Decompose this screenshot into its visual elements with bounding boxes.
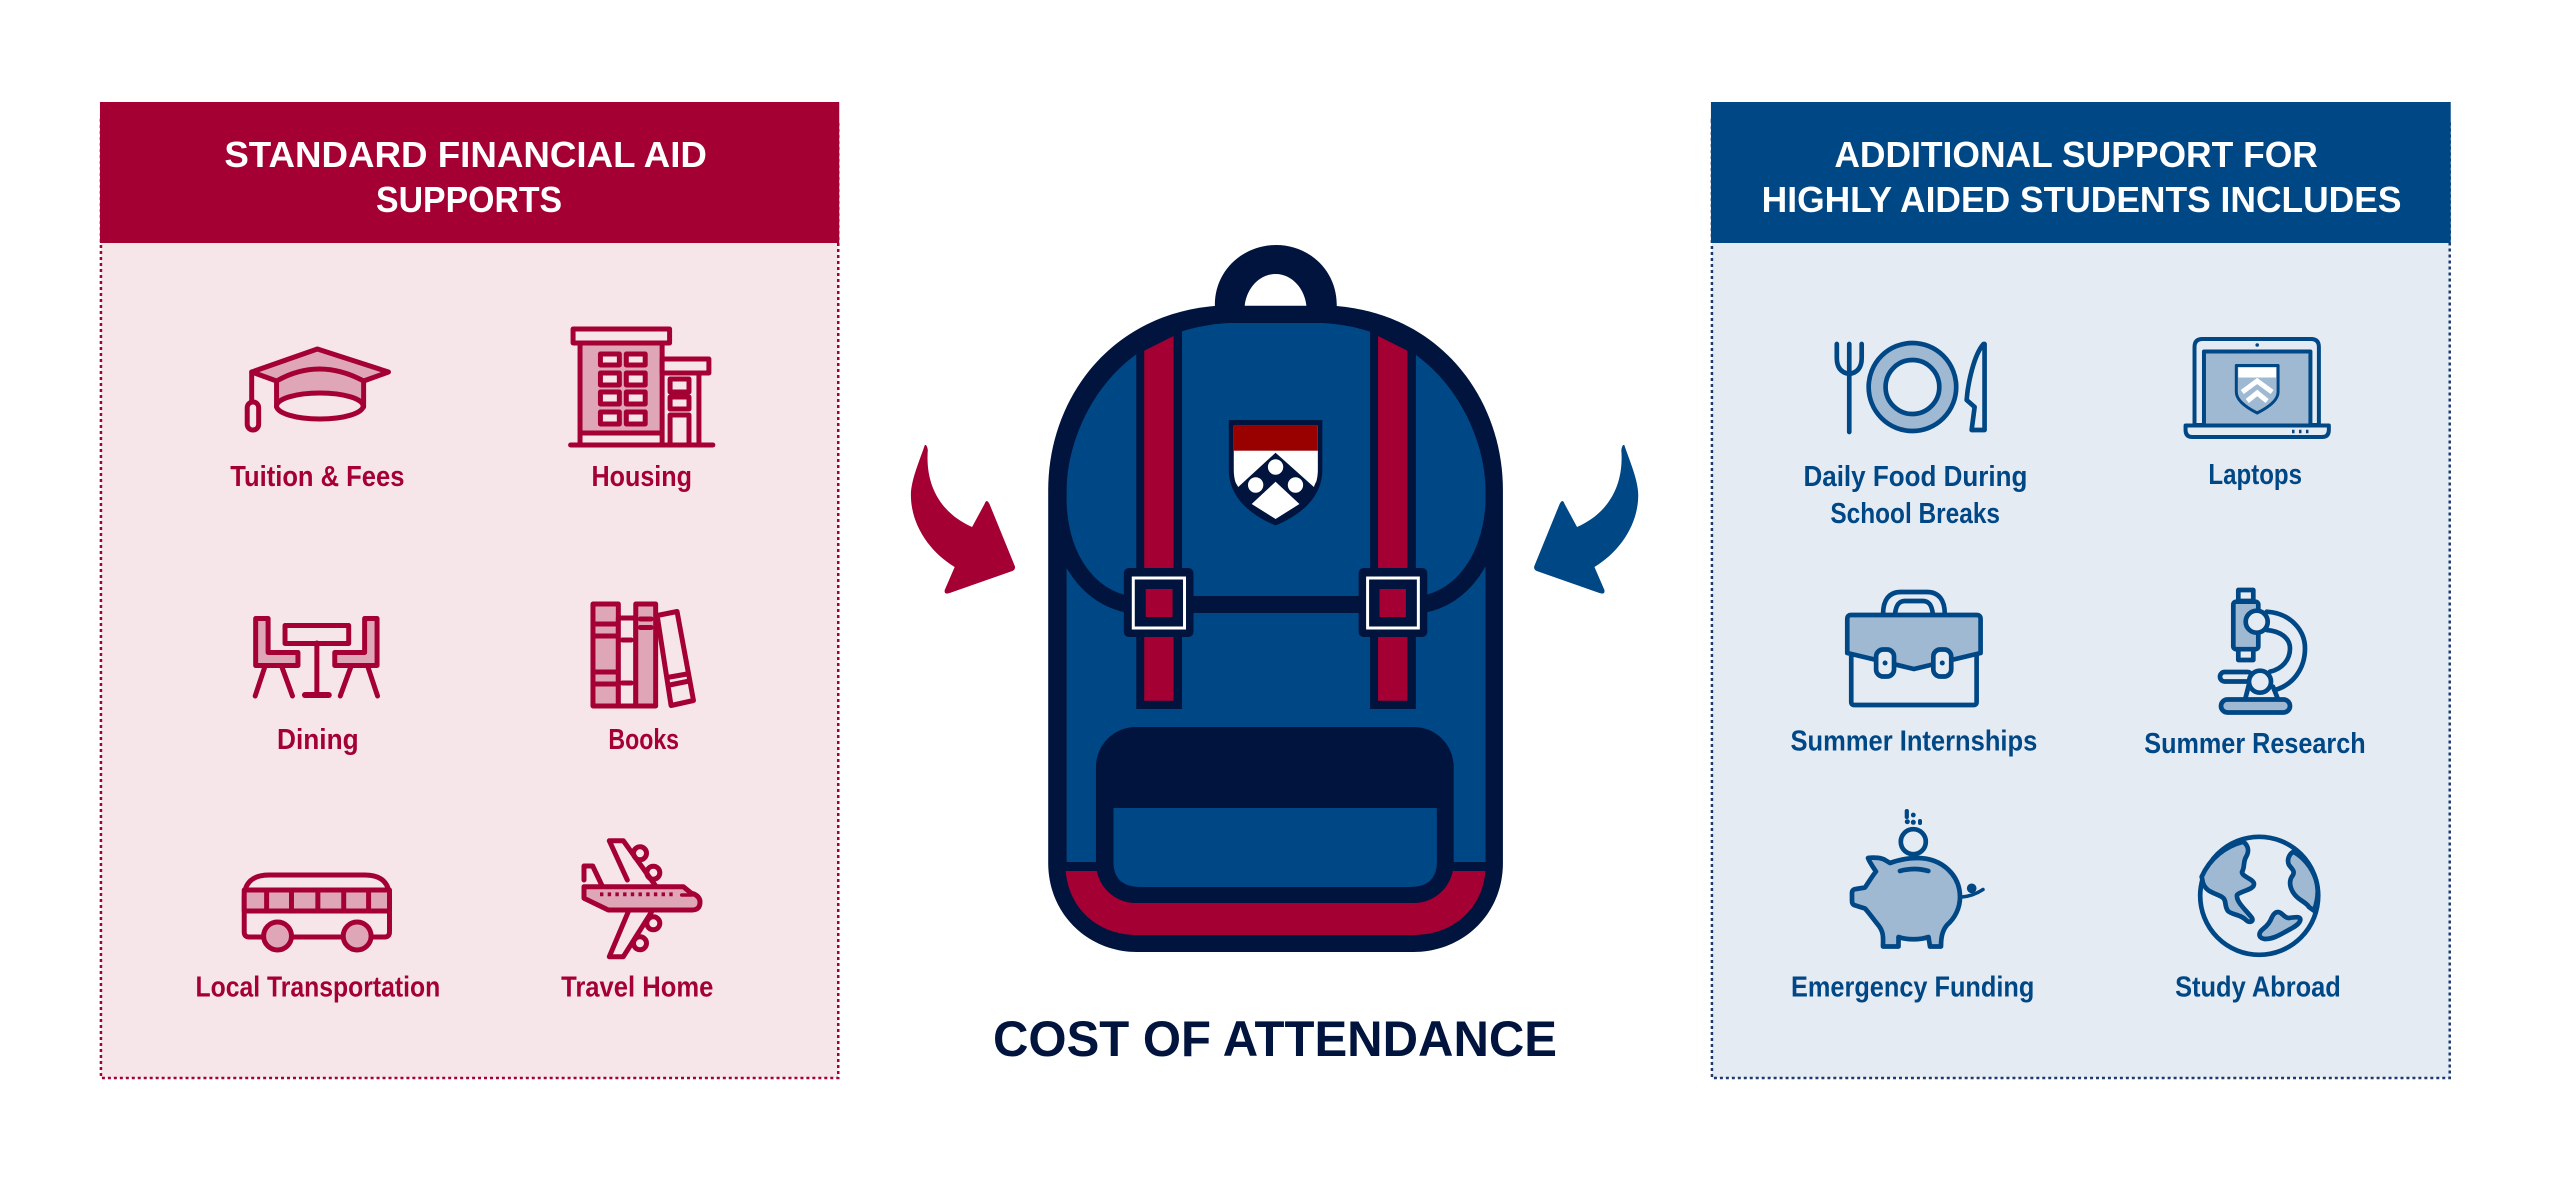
icon: microscope bbox=[2220, 590, 2305, 712]
label: laptops: Laptops bbox=[2208, 459, 2302, 491]
header band: additional support: ADDITIONAL SUPPORT FOR bbox=[1834, 134, 2318, 175]
label: local transportation: Local Transportation bbox=[195, 971, 440, 1004]
header band: additional support: HIGHLY AIDED STUDENTS INCLUDES bbox=[1762, 179, 2401, 220]
backpack illustration bbox=[1048, 245, 1503, 952]
header band: standard aid: STANDARD FINANCIAL AID bbox=[224, 134, 707, 175]
left strap bbox=[1136, 325, 1182, 709]
label: dining: Dining bbox=[277, 724, 359, 756]
label: tuition: Tuition & Fees bbox=[230, 461, 404, 493]
bottom trim bbox=[1066, 871, 1486, 935]
label: daily food: Daily Food During bbox=[1803, 461, 2027, 493]
label: travel home: Travel Home bbox=[561, 971, 713, 1004]
icon: plate fork and knife bbox=[1837, 343, 1985, 432]
upper pocket seam bbox=[1058, 505, 1494, 604]
arrow: red into backpack bbox=[911, 445, 1015, 594]
backpack outline bbox=[1048, 306, 1503, 952]
label: housing: Housing bbox=[591, 461, 692, 493]
right strap bbox=[1370, 325, 1416, 709]
icon: globe bbox=[2200, 837, 2318, 955]
title: cost of attendance: COST OF ATTENDANCE bbox=[993, 1011, 1557, 1067]
header band: standard aid: SUPPORTS bbox=[376, 179, 562, 220]
arrow: blue into backpack bbox=[1534, 445, 1638, 594]
icon: piggy bank bbox=[1852, 809, 1983, 946]
panel body: standard aid bbox=[101, 120, 838, 1078]
label: books: Books bbox=[608, 724, 679, 756]
label: emergency funding: Emergency Funding bbox=[1791, 971, 2034, 1004]
icon: books bbox=[593, 604, 693, 706]
panel body: additional support bbox=[1712, 120, 2450, 1078]
icon: airplane bbox=[584, 841, 700, 957]
icon: bus bbox=[244, 875, 389, 950]
backpack main fill bbox=[1067, 323, 1486, 862]
icon: housing building bbox=[571, 329, 713, 445]
penn shield crest bbox=[1229, 420, 1322, 526]
left buckle bbox=[1124, 568, 1193, 637]
icon: laptop bbox=[2186, 339, 2329, 437]
right buckle bbox=[1359, 568, 1427, 637]
panel: additional support bbox=[1711, 102, 2451, 1078]
label: summer internships: Summer Internships bbox=[1791, 725, 2037, 758]
header band: additional support bbox=[1711, 102, 2451, 243]
icon: graduation cap bbox=[247, 349, 388, 430]
label: study abroad: Study Abroad bbox=[2175, 971, 2341, 1004]
header band: standard aid bbox=[100, 102, 839, 243]
icon: briefcase bbox=[1847, 592, 1981, 705]
front pocket bbox=[1096, 727, 1454, 903]
backpack handle bbox=[1215, 245, 1337, 312]
label: summer research: Summer Research bbox=[2144, 728, 2366, 760]
label: daily food: School Breaks bbox=[1830, 498, 2000, 530]
label: daily food bbox=[1803, 461, 2027, 530]
icon: dining table and chairs bbox=[255, 618, 378, 696]
panel: standard financial aid bbox=[100, 102, 839, 1078]
